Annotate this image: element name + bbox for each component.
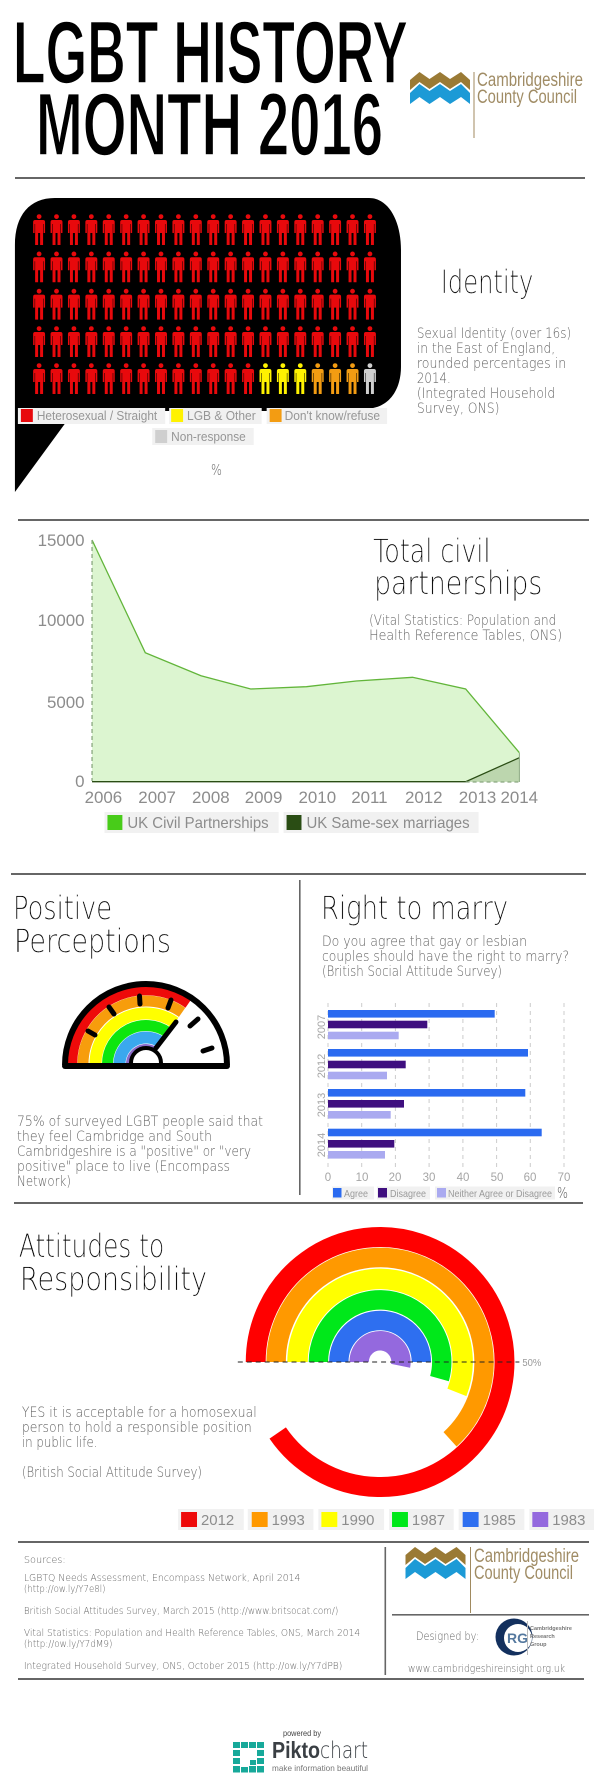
y axis labels: 10000 xyxy=(38,611,85,630)
legend: attitudes years xyxy=(178,1509,594,1530)
text: attitudes description xyxy=(22,1405,257,1481)
text: positive perceptions xyxy=(17,1114,263,1190)
bar chart year labels xyxy=(316,1015,328,1157)
logo: Cambridgeshire County Council footer: County Council xyxy=(474,1563,573,1584)
y axis labels xyxy=(38,531,85,791)
icon: rainbow gauge xyxy=(65,984,227,1066)
panel: sources: (http://ow.ly/Y7e8l) xyxy=(24,1584,105,1595)
heading: total civil partnerships xyxy=(373,532,542,602)
logo: Piktochart xyxy=(233,1728,368,1773)
heading: attitudes to responsibility: Responsibility xyxy=(20,1260,207,1298)
text: attitudes description: YES it is acceptable for a homosexual xyxy=(22,1405,257,1421)
radial bar chart xyxy=(238,1237,519,1487)
x axis labels: 2009 xyxy=(245,788,282,807)
title: MONTH 2016 xyxy=(36,75,383,174)
speech bubble xyxy=(15,198,401,492)
title xyxy=(13,3,408,174)
bar chart year labels: 2013 xyxy=(316,1093,328,1117)
legend: right to marry: Disagree xyxy=(390,1188,426,1200)
bar chart value axis: 30 xyxy=(423,1172,435,1184)
legend: identity: Heterosexual / Straight xyxy=(37,409,158,423)
panel: identity xyxy=(15,198,571,492)
logo: Piktochart: make information beautiful xyxy=(272,1763,368,1773)
text: positive perceptions: positive" place to live (Encompass xyxy=(17,1159,230,1175)
panel: sources: Sources: xyxy=(24,1555,66,1566)
text: designed by: Designed by: xyxy=(416,1629,479,1643)
bar chart year labels: 2007 xyxy=(316,1015,328,1039)
pictogram: 100 people xyxy=(33,214,376,394)
text: survey question xyxy=(322,934,569,980)
text: website: www.cambridgeshireinsight.org.uk xyxy=(408,1662,566,1675)
heading: attitudes to responsibility xyxy=(19,1227,207,1298)
text: civil partnerships source: (Vital Statistics: Population and xyxy=(369,613,556,629)
text: civil partnerships source: Health Reference Tables, ONS) xyxy=(369,628,562,644)
text: positive perceptions: 75% of surveyed LGBT people said that xyxy=(17,1114,263,1130)
text: positive perceptions: they feel Cambridge and South xyxy=(17,1129,212,1145)
panel: total civil partnerships xyxy=(38,531,562,833)
bar chart value axis: 0 xyxy=(325,1172,331,1184)
legend: attitudes years: 1993 xyxy=(272,1512,305,1529)
logo: Piktochart: Pikto xyxy=(272,1737,320,1763)
panel: right to marry xyxy=(316,889,570,1202)
x axis labels: 2006 xyxy=(85,788,122,807)
bar chart year labels: 2012 xyxy=(316,1054,328,1078)
logo: Cambridgeshire Research Group xyxy=(496,1618,572,1656)
panel: sources: Integrated Household Survey, ONS, October 2015 (http://ow.ly/Y7dPB) xyxy=(24,1661,342,1672)
panel: sources xyxy=(24,1555,360,1672)
x axis labels: 2010 xyxy=(298,788,336,807)
legend: identity xyxy=(18,408,387,445)
x axis labels xyxy=(85,788,538,807)
bar chart value axis: 50 xyxy=(491,1172,503,1184)
text: identity description: Sexual Identity (over 16s) xyxy=(417,326,571,342)
legend: identity: Non-response xyxy=(171,430,246,444)
text: identity description: Survey, ONS) xyxy=(417,401,499,417)
bar chart value axis: 60 xyxy=(524,1172,536,1184)
y axis labels: 0 xyxy=(75,772,85,791)
heading: right to marry: Right to marry xyxy=(321,889,508,927)
legend: right to marry: Agree xyxy=(344,1188,368,1200)
legend: attitudes years: 2012 xyxy=(201,1512,234,1529)
heading: identity: Identity xyxy=(441,263,533,301)
panel: sources: British Social Attitudes Survey, March 2015 (http://www.britsocat.com/) xyxy=(24,1606,338,1617)
text: attitudes description: in public life. xyxy=(22,1435,98,1451)
legend: right to marry xyxy=(332,1186,555,1200)
logo: Cambridgeshire County Council footer xyxy=(406,1546,579,1613)
legend: civil partnerships xyxy=(104,812,479,833)
legend: attitudes years: 1983 xyxy=(552,1512,585,1529)
logo: Cambridgeshire Research Group: Group xyxy=(530,1642,547,1648)
x axis labels: 2011 xyxy=(351,788,388,807)
legend: civil partnerships: UK Same-sex marriages xyxy=(306,815,470,832)
x axis labels: 2008 xyxy=(192,788,230,807)
text: attitudes description: (British Social Attitude Survey) xyxy=(22,1465,202,1481)
x axis labels: 2012 xyxy=(405,788,443,807)
heading: positive perceptions: Positive xyxy=(13,889,112,927)
x axis labels: 2013 xyxy=(459,788,496,807)
bar chart value axis: 70 xyxy=(558,1172,570,1184)
legend: attitudes years: 1990 xyxy=(341,1512,374,1529)
heading: total civil partnerships: Total civil xyxy=(373,532,491,570)
heading: total civil partnerships: partnerships xyxy=(374,564,542,602)
text: survey question: (British Social Attitude Survey) xyxy=(322,964,502,980)
text: attitudes description: person to hold a responsible position xyxy=(22,1420,252,1436)
legend: identity: Don't know/refuse xyxy=(285,409,380,423)
x axis labels: 2007 xyxy=(138,788,176,807)
percent label: % xyxy=(211,461,222,479)
legend: attitudes years: 1987 xyxy=(412,1512,445,1529)
label: 50 percent: 50% xyxy=(522,1358,541,1369)
text: survey question: couples should have the right to marry? xyxy=(322,949,569,965)
legend: identity: LGB & Other xyxy=(187,409,256,423)
text: identity description: rounded percentages in xyxy=(417,356,566,372)
heading: positive perceptions: Perceptions xyxy=(14,922,171,960)
logo: Cambridgeshire Research Group: Cambridgeshire xyxy=(530,1626,572,1632)
panel: sources: Vital Statistics: Population and Health Reference Tables, ONS, March 2014 xyxy=(24,1628,360,1639)
text: positive perceptions: Network) xyxy=(17,1174,71,1190)
text: survey question: Do you agree that gay or lesbian xyxy=(322,934,527,950)
logo: Cambridgeshire Research Group: RG xyxy=(507,1630,528,1646)
area chart xyxy=(92,540,519,782)
legend: right to marry: Neither Agree or Disagree xyxy=(448,1188,552,1200)
bar chart value axis: 40 xyxy=(457,1172,469,1184)
bar chart xyxy=(328,1003,564,1168)
text: identity description: 2014. xyxy=(417,371,451,387)
heading: positive perceptions xyxy=(13,889,171,960)
legend: civil partnerships: UK Civil Partnerships xyxy=(127,815,269,832)
legend: attitudes years: 1985 xyxy=(483,1512,516,1529)
bar chart value axis: 10 xyxy=(356,1172,368,1184)
text: identity description: (Integrated Household xyxy=(417,386,555,402)
bar chart year labels: 2014 xyxy=(316,1133,328,1157)
text: identity description: in the East of England, xyxy=(417,341,555,357)
bar chart value axis xyxy=(325,1172,570,1184)
logo: Cambridgeshire Research Group: Research xyxy=(530,1634,555,1640)
panel: attitudes to responsibility xyxy=(19,1227,594,1530)
text: identity description xyxy=(417,326,571,417)
heading: attitudes to responsibility: Attitudes to xyxy=(19,1227,164,1265)
panel: sources: (http://ow.ly/Y7dM9) xyxy=(24,1639,112,1650)
text: positive perceptions: Cambridgeshire is a "positive" or "very xyxy=(17,1144,251,1160)
x axis labels: 2014 xyxy=(500,788,538,807)
bar chart value axis: 20 xyxy=(389,1172,401,1184)
text: civil partnerships source xyxy=(369,613,562,644)
panel: sources: LGBTQ Needs Assessment, Encompass Network, April 2014 xyxy=(24,1573,300,1584)
y axis labels: 15000 xyxy=(38,531,85,550)
percent label: % xyxy=(557,1184,568,1202)
y axis labels: 5000 xyxy=(47,693,85,712)
logo: Piktochart: chart xyxy=(320,1738,368,1764)
logo: Cambridgeshire County Council xyxy=(410,70,583,138)
logo: Piktochart: powered by xyxy=(283,1728,322,1738)
panel: positive perceptions xyxy=(13,889,263,1190)
